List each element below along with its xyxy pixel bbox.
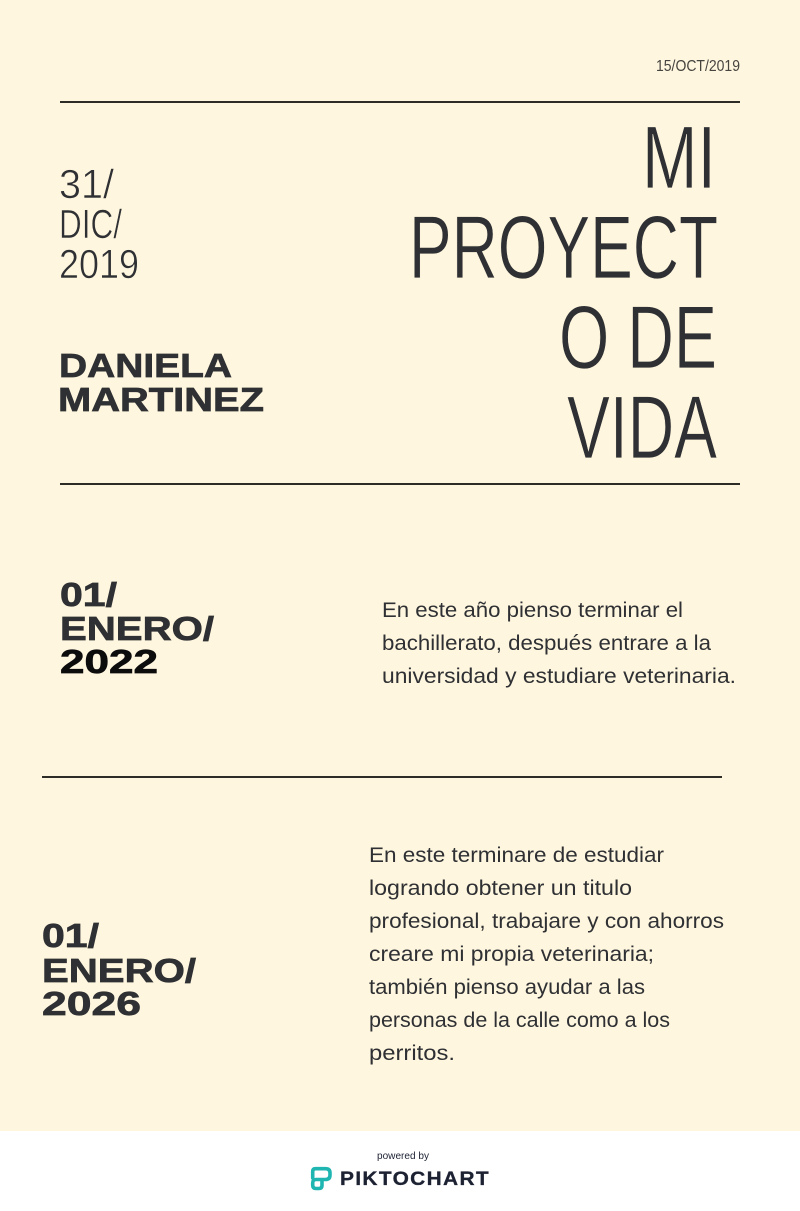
publication date: 15/OCT/2019	[656, 58, 740, 75]
author name: DANIELA	[59, 347, 232, 384]
milestone 2022 text: universidad y estudiare veterinaria.	[382, 664, 736, 688]
target date: 2019	[59, 241, 139, 287]
milestone 2026 text: profesional, trabajare y con ahorros	[369, 909, 724, 933]
milestone 2026 date: ENERO/	[42, 952, 196, 989]
author name: MARTINEZ	[58, 381, 264, 418]
target date	[59, 161, 139, 287]
milestone 2022 text: En este año pienso terminar el	[382, 598, 683, 622]
milestone 2022 date: ENERO/	[60, 610, 214, 647]
milestone 2026 text: creare mi propia veterinaria;	[369, 942, 654, 966]
milestone 2022 text: bachillerato, después entrare a la	[382, 631, 711, 655]
icon: piktochart logo	[313, 1169, 330, 1188]
piktochart wordmark: PIKTOCHART	[340, 1169, 490, 1190]
milestone 2026 text: logrando obtener un titulo	[369, 876, 632, 900]
footer panel	[0, 1131, 800, 1211]
milestone 2022 date: 2022	[60, 643, 158, 680]
milestone 2026 text	[369, 843, 724, 1065]
title: O DE	[559, 287, 717, 387]
milestone 2026 date: 2026	[42, 985, 141, 1022]
milestone 2026 text: personas de la calle como a los	[369, 1008, 670, 1032]
milestone 2026 date	[42, 917, 196, 1022]
powered by label: powered by	[377, 1151, 429, 1162]
target date: 31/	[59, 161, 115, 207]
title	[409, 107, 718, 477]
milestone 2026 text: En este terminare de estudiar	[369, 843, 664, 867]
title: MI	[642, 107, 716, 207]
title: VIDA	[567, 377, 717, 477]
milestone 2026 date: 01/	[42, 917, 99, 954]
milestone 2022 text	[382, 598, 736, 688]
target date: DIC/	[59, 201, 122, 247]
milestone 2026 text: perritos.	[369, 1041, 455, 1065]
milestone 2022 date: 01/	[60, 576, 117, 613]
author name	[58, 347, 264, 418]
milestone 2026 text: también pienso ayudar a las	[369, 975, 645, 999]
milestone 2022 date	[60, 576, 214, 680]
